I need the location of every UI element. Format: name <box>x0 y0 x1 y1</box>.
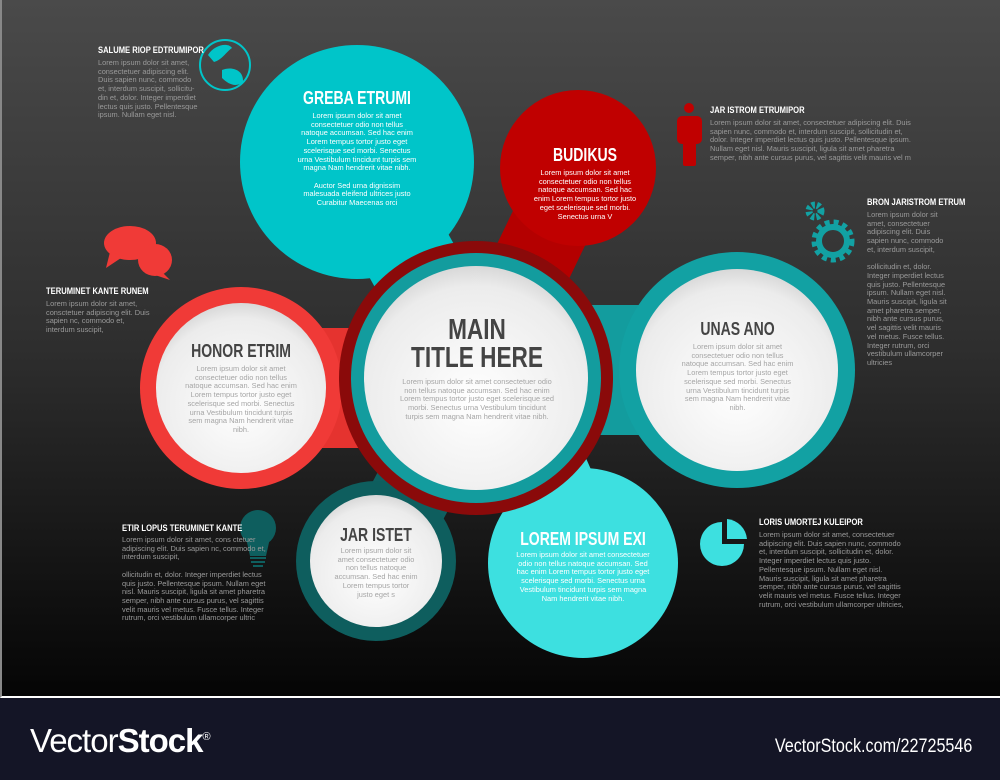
circle text: greba <box>298 88 416 207</box>
circle text: budikus <box>534 145 636 221</box>
icon: chat <box>104 226 172 280</box>
circle text: jar istet: Lorem ipsum dolor sit amet consectetuer odio non tellus natoque accumsan. Sed hac enim Lorem tempus tortor justo eget s <box>334 546 417 599</box>
circle text: honor: Lorem ipsum dolor sit amet consectetuer odio non tellus natoque accumsan. Sed hac enim Lorem tempus tortor justo eget scelerisque sed morbi. Senectus urna Vestibulum tincidunt turpis sem magna Nam hendrerit vitae nibh. <box>185 364 297 434</box>
footer banner <box>0 700 1000 780</box>
text block: jar istrom <box>710 105 911 162</box>
circle: honor <box>140 287 342 489</box>
text block: bron <box>867 197 965 367</box>
circle text: budikus: BUDIKUS <box>553 145 617 165</box>
text: Lorem ipsum dolor sit amet, consectetuer adipiscing elit. Duis sapien nunc, commodo et, interdum suscipit, sollicitu-din et, dolor. Integer imperdiet lectus quis justo. Pellentesque ipsum. Nullam eget nisl. <box>98 58 197 119</box>
circle text: unas: UNAS ANO <box>700 319 775 339</box>
circle: jar istet <box>296 481 456 641</box>
circle: main <box>339 241 613 515</box>
circle text: greba: GREBA ETRUMI <box>303 88 411 108</box>
circle text: main: Lorem ipsum dolor sit amet consectetuer odio non tellus natoque accumsan. Sed hac enim Lorem tempus tortor justo eget scelerisque sed morbi. Senectus urna Vestibulum tincidunt turpis sem magna Nam hendrerit vitae nibh. <box>400 377 554 421</box>
text: TERUMINET KANTE RUNEM <box>46 286 149 297</box>
text: SALUME RIOP EDTRUMIPOR <box>98 45 204 56</box>
text: JAR ISTROM ETRUMIPOR <box>710 105 805 116</box>
text: Lorem ipsum dolor sit amet, consctetuer adipiscing elit. Duis sapien nc, commodo et, interdum suscipit, <box>46 299 150 334</box>
circle: unas <box>619 252 855 488</box>
circle text: jar istet: JAR ISTET <box>340 525 412 545</box>
circle text: main: TITLE HERE <box>411 342 543 374</box>
circle text: lorem exi: Lorem ipsum dolor sit amet consectetuer odio non tellus natoque accumsan. Sed hac enim Lorem tempus tortor justo eget scelerisque sed morbi. Senectus urna Vestibulum tincidunt turpis sem magna Nam hendrerit vitae nibh. <box>516 550 650 603</box>
logo: VectorStock® <box>30 722 210 759</box>
circle text: budikus: Lorem ipsum dolor sit amet consectetuer odio non tellus natoque accumsan. Sed hac enim Lorem tempus tortor justo eget scelerisque sed morbi. Senectus urna V <box>534 168 636 221</box>
circle text: greba: Auctor Sed urna dignissim malesuada eleifend ultrices justo Curabitur Maecenas orci <box>303 181 411 207</box>
circle: greba <box>240 45 474 279</box>
icon: globe <box>200 40 250 90</box>
text: ETIR LOPUS TERUMINET KANTE <box>122 523 242 534</box>
circle: budikus <box>500 90 656 246</box>
circle: lorem exi <box>488 468 678 658</box>
icon: bulb <box>240 510 276 567</box>
text block: etir <box>122 523 266 622</box>
connector blobs <box>241 162 737 563</box>
text: LORIS UMORTEJ KULEIPOR <box>759 517 863 528</box>
circle text: main <box>400 314 554 421</box>
icon: pie <box>700 519 747 566</box>
icon: person <box>677 103 702 166</box>
text: Lorem ipsum dolor sit amet, cons ctetuer adipiscing elit. Duis sapien nc, commodo et, interdum suscipit, <box>122 535 266 561</box>
text: Lorem ipsum dolor sit amet, consectetuer adipiscing elit. Duis sapien nunc, commodo et, interdum suscipit, sollicitudin et, dolor. Integer imperdiet lectus quis justo. Pellentesque ipsum. Nullam eget nisl. Mauris suscipit, ligula sit amet pharetra semper, nibh ante cursus purus, vel sagittis velit mauris vel m <box>710 118 911 162</box>
text: Lorem ipsum dolor sit amet, consectetuer adipiscing elit. Duis sapien nunc, commodo et, interdum suscipit, sollicitudin et, dolor. Integer imperdiet lectus quis justo. Pellentesque ipsum. Nullam eget nisl. Mauris suscipit, ligula sit amet pharetra semper, nibh ante cursus purus, vel sagittis velit mauris vel metus. Fusce tellus. Integer rutrum, orci vestibulum ullamcorper ultricies, <box>759 530 904 609</box>
url: VectorStock.com/22725546 <box>774 736 972 757</box>
icon: gears <box>809 205 852 260</box>
text: BRON JARISTROM ETRUM <box>867 197 965 208</box>
text: ollicitudin et, dolor. Integer imperdiet lectus quis justo. Pellentesque ipsum. Nullam eget nisl. Mauris suscipit, ligula sit amet pharetra semper, nibh ante cursus purus, vel sagittis velit mauris vel metus. Fusce tellus. Integer rutrum, orci vestibulum ullamcorper ultric <box>122 570 265 622</box>
circle text: lorem exi: LOREM IPSUM EXI <box>520 529 646 549</box>
text block: salume <box>98 45 204 119</box>
circle text: honor: HONOR ETRIM <box>191 341 291 361</box>
text block: teruminet <box>46 286 150 334</box>
circle text: greba: Lorem ipsum dolor sit amet consectetuer odio non tellus natoque accumsan. Sed hac enim Lorem tempus tortor justo eget scelerisque sed morbi. Senectus urna Vestibulum tincidunt turpis sem magna Nam hendrerit vitae nibh. <box>298 111 416 172</box>
text: Lorem ipsum dolor sit amet, consectetuer adipiscing elit. Duis sapien nunc, commodo et, interdum suscipit, <box>867 210 943 254</box>
circle text: main: MAIN <box>448 314 506 346</box>
text: sollicitudin et, dolor. Integer imperdiet lectus quis justo. Pellentesque ipsum. Nullam eget nisl. Mauris suscipit, ligula sit amet pharetra semper, nibh ante cursus purus, vel sagittis velit mauris vel metus. Fusce tellus. Integer rutrum, orci vestibulum ullamcorper ultricies <box>867 262 947 367</box>
circle text: unas: Lorem ipsum dolor sit amet consectetuer odio non tellus natoque accumsan. Sed hac enim Lorem tempus tortor justo eget scelerisque sed morbi. Senectus urna Vestibulum tincidunt turpis sem magna Nam hendrerit vitae nibh. <box>682 342 793 412</box>
text block: loris <box>759 517 904 609</box>
